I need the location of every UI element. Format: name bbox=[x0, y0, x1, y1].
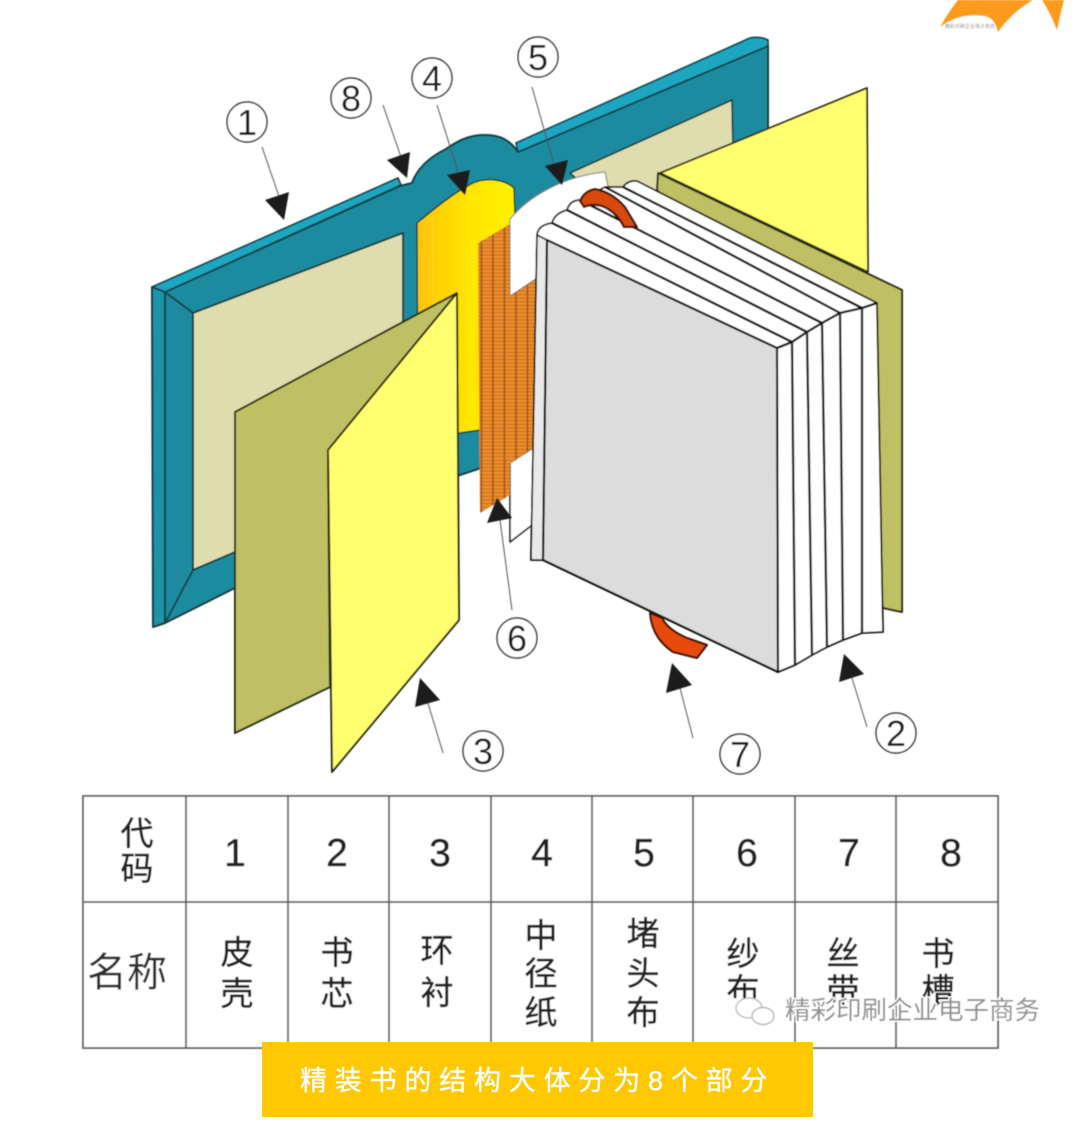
name row: 芯 bbox=[320, 975, 354, 1012]
arrow and label 6 bbox=[487, 498, 537, 659]
name row: 丝 bbox=[826, 935, 860, 972]
name row: 壳 bbox=[220, 975, 254, 1012]
case cover (1) bbox=[152, 37, 768, 627]
ribbon top (7) bbox=[580, 189, 637, 227]
banner: caption bbox=[262, 1042, 813, 1117]
name row: 径 bbox=[524, 955, 558, 992]
header row: 6 bbox=[736, 832, 758, 875]
name row: 带 bbox=[826, 972, 860, 1009]
arrow and label 7: 7 bbox=[730, 734, 750, 775]
arrow and label 5 bbox=[518, 37, 568, 185]
name row: 书 bbox=[320, 934, 354, 971]
arrow and label 8 bbox=[331, 78, 410, 178]
name row: 堵 bbox=[626, 915, 660, 952]
name row bbox=[87, 915, 954, 1031]
header row bbox=[120, 815, 962, 887]
name row: 布 bbox=[726, 972, 760, 1009]
name row: 皮 bbox=[220, 934, 254, 971]
arrow and label 3: 3 bbox=[473, 731, 493, 772]
diagram: exploded hardcover book bbox=[152, 37, 902, 772]
header row: 代 bbox=[120, 815, 154, 852]
name row: 环 bbox=[420, 932, 454, 969]
header row: 码 bbox=[120, 850, 154, 887]
arrow and label 8: 8 bbox=[341, 78, 361, 119]
name row: 槽 bbox=[922, 972, 954, 1009]
logo: orange corner mark bbox=[940, 0, 1064, 32]
name row: 书 bbox=[922, 935, 954, 972]
book block (2) bbox=[531, 181, 883, 672]
watermark: WeChat account: 精彩印刷企业电子商务 bbox=[785, 997, 1040, 1025]
name row: 纸 bbox=[524, 994, 558, 1031]
name row: 名称 bbox=[87, 951, 167, 995]
headband white paper (5) bbox=[510, 172, 608, 296]
arrow and label 1: 1 bbox=[237, 102, 257, 143]
name row: 衬 bbox=[420, 974, 454, 1011]
header row: 7 bbox=[838, 832, 860, 875]
name row: 头 bbox=[626, 955, 660, 992]
ribbon bottom (7) bbox=[650, 613, 707, 658]
arrow and label 3 bbox=[415, 678, 503, 772]
logo: orange corner mark: 精彩印刷企业电子商务 bbox=[945, 23, 995, 30]
banner: caption: 精装书的结构大体分为8个部分 bbox=[300, 1066, 775, 1096]
arrow and label 4 bbox=[412, 58, 470, 195]
arrow and label 2 bbox=[839, 654, 916, 754]
arrow and label 7 bbox=[666, 663, 760, 775]
name row: 布 bbox=[626, 994, 660, 1031]
arrow and label 6: 6 bbox=[507, 618, 527, 659]
header row: 4 bbox=[531, 832, 553, 875]
gauze (6) bbox=[478, 205, 545, 513]
arrow and label 2: 2 bbox=[886, 713, 906, 754]
table: part codes and names bbox=[83, 796, 998, 1048]
header row: 1 bbox=[224, 832, 246, 875]
header row: 3 bbox=[429, 832, 451, 875]
header row: 8 bbox=[940, 832, 962, 875]
header row: 2 bbox=[326, 832, 348, 875]
arrow and label 1 bbox=[227, 102, 289, 220]
header row: 5 bbox=[633, 832, 655, 875]
spine paper (4) bbox=[417, 180, 515, 440]
name row: 纱 bbox=[726, 935, 760, 972]
arrow and label 4: 4 bbox=[422, 58, 442, 99]
left endpaper (3) bbox=[235, 293, 459, 772]
arrow and label 5: 5 bbox=[528, 37, 548, 78]
name row: 中 bbox=[524, 917, 558, 954]
white endband paper lower piece bbox=[510, 440, 545, 542]
right endpaper bbox=[657, 88, 902, 612]
